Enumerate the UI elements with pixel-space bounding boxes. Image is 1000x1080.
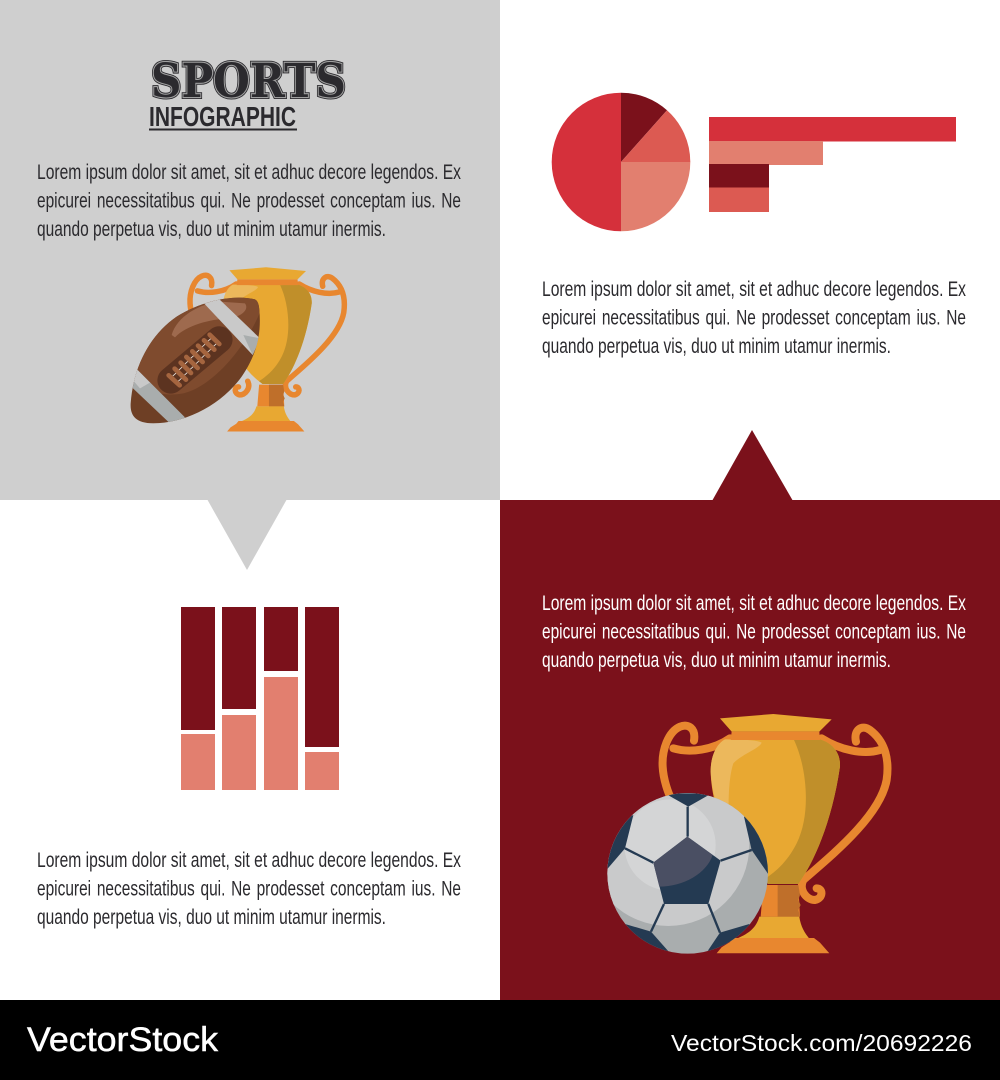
watermark bar: VectorStock.com/20692226 [671,1030,972,1056]
watermark bar: VectorStock [27,1021,219,1059]
panel: grey top left [0,0,500,570]
title: SPORTS [151,54,346,109]
panel: maroon bottom right [500,430,1000,1000]
title: SPORTS [151,54,346,109]
text block: top left: Lorem ipsum dolor sit amet, sit et adhuc decore legendos. Ex [37,160,461,184]
icon: soccer ball [607,793,768,954]
text block: top left: epicurei necessitatibus qui. Ne prodesset conceptam ius. Ne [37,188,461,212]
horizontal bar chart [709,117,956,212]
text block: top left: quando perpetua vis, duo ut minim utamur inermis. [37,217,386,241]
text block: bottom left: Lorem ipsum dolor sit amet, sit et adhuc decore legendos. Ex [37,848,461,872]
title [149,54,346,132]
text block: bottom left: quando perpetua vis, duo ut minim utamur inermis. [37,905,386,929]
title: SPORTS [151,54,346,109]
stacked bar chart [181,607,339,790]
icon: trophy behind football [190,267,344,432]
text block: top left [37,160,461,241]
pie chart [552,93,690,231]
watermark bar [0,1000,1000,1080]
icon: trophy behind soccer ball [663,714,887,953]
icon: american football [130,298,260,424]
text block: bottom right [542,591,966,672]
text block: top right [542,277,966,358]
text block: bottom left: epicurei necessitatibus qui. Ne prodesset conceptam ius. Ne [37,876,461,900]
text block: bottom left [37,848,461,929]
title: INFOGRAPHIC [149,101,296,132]
